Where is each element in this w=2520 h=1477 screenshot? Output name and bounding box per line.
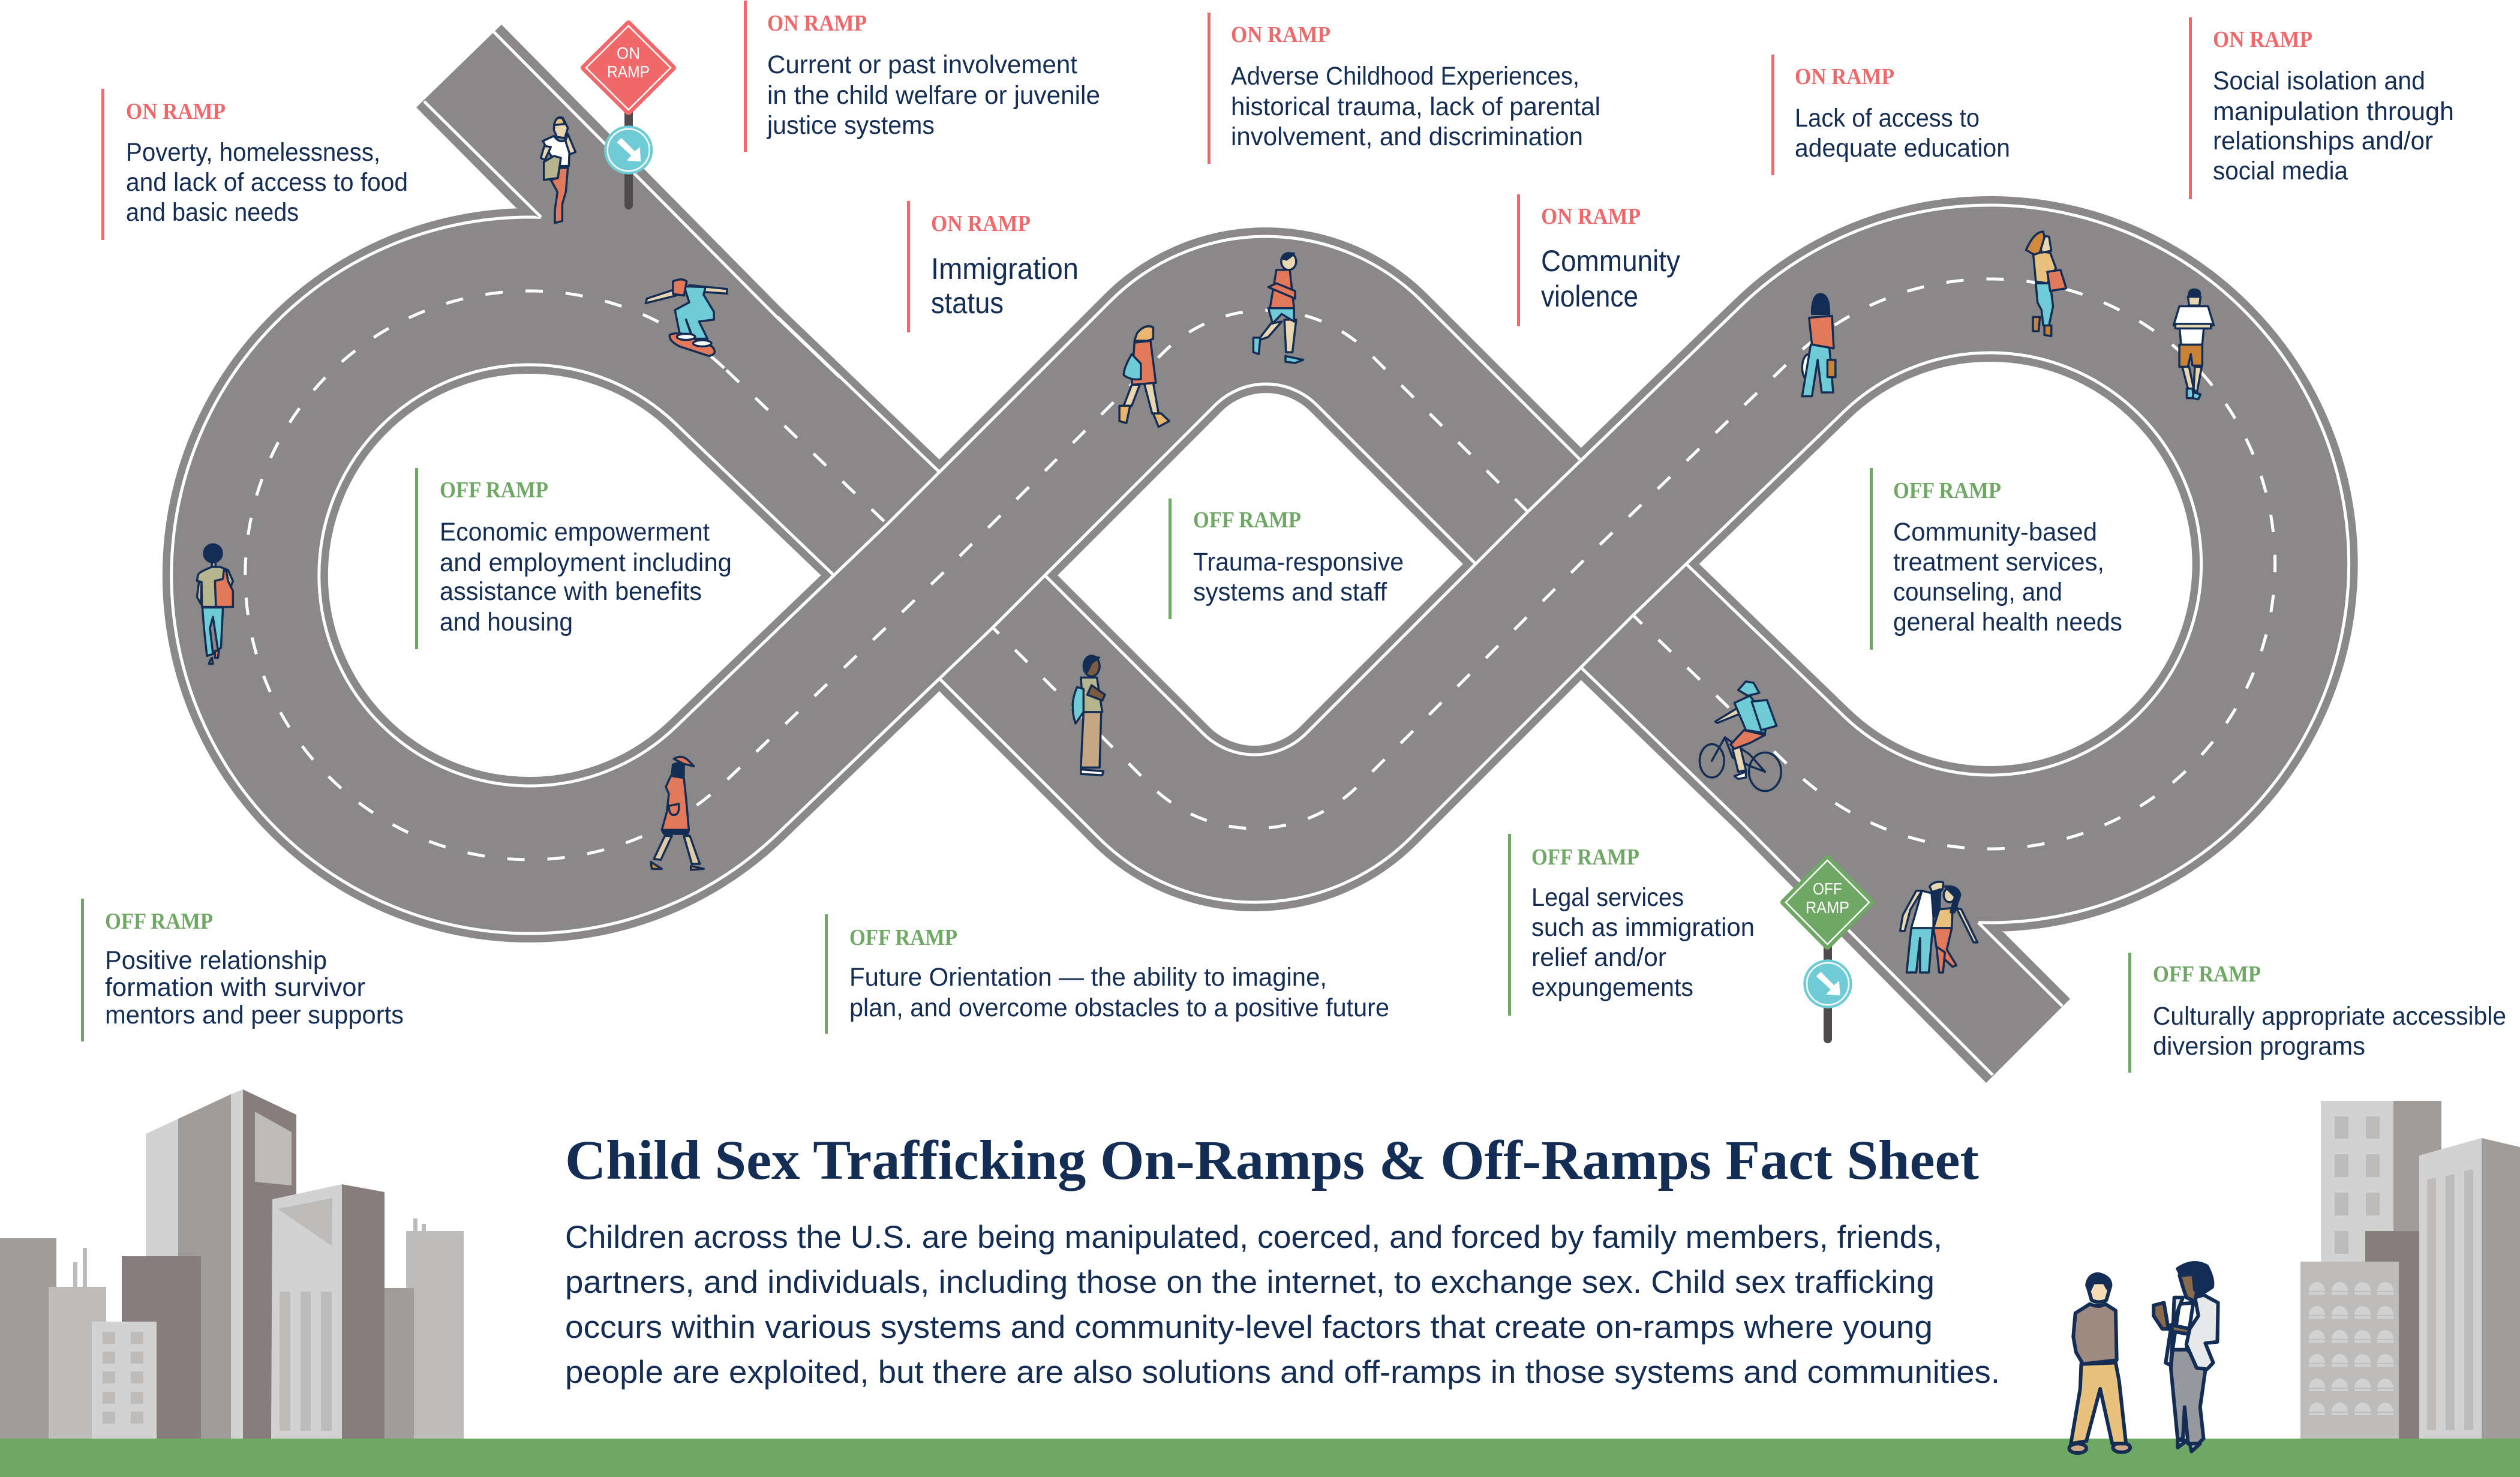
text block: mentors and peer supports xyxy=(105,1001,404,1029)
person: woman in red dress xyxy=(651,757,704,870)
text block: Community-based xyxy=(1893,518,2097,547)
text block: intro: Children across the U.S. are being manipulated, coerced, and forced by family members, friends, xyxy=(565,1220,1942,1255)
label: OFF RAMP xyxy=(849,925,957,950)
text block: Social isolation and xyxy=(2213,67,2425,95)
text block: Immigration xyxy=(931,252,1079,286)
text block xyxy=(1541,244,1680,313)
road: infinity-shaped highway with ramps xyxy=(245,25,2275,1083)
label: ON RAMP xyxy=(126,99,226,124)
person: couple walking xyxy=(1900,882,1978,972)
panel: on ramp community violence xyxy=(1517,194,1680,326)
text block: social media xyxy=(2213,157,2348,185)
text block: in the child welfare or juvenile xyxy=(767,81,1100,110)
panel: on ramp social isolation xyxy=(2189,17,2454,199)
text block xyxy=(2213,67,2454,185)
text block: Poverty, homelessness, xyxy=(126,138,380,167)
text block: and employment including xyxy=(440,548,732,577)
text block: relationships and/or xyxy=(2213,127,2433,155)
text block: and basic needs xyxy=(126,198,299,227)
panel: off ramp trauma-responsive xyxy=(1169,499,1404,619)
panel: off ramp positive relationship xyxy=(81,899,404,1041)
text block xyxy=(105,946,404,1029)
building group: right skyline xyxy=(2300,1101,2520,1439)
text block: manipulation through xyxy=(2213,97,2454,126)
panel: on ramp immigration xyxy=(907,201,1079,332)
text block: systems and staff xyxy=(1193,578,1387,607)
text block xyxy=(766,50,1100,140)
sign: on ramp: RAMP xyxy=(607,62,650,81)
text block: Legal services xyxy=(1531,883,1684,912)
panel: on ramp poverty xyxy=(101,89,408,240)
panel: off ramp future orientation xyxy=(825,914,1389,1034)
person: man in white tee xyxy=(2174,289,2213,400)
text block: relief and/or xyxy=(1531,943,1666,972)
person: polka dot dress woman xyxy=(1119,326,1169,427)
text block: Trauma-responsive xyxy=(1193,548,1404,577)
text block xyxy=(126,138,408,227)
panel: off ramp legal services xyxy=(1508,834,1755,1016)
text block: treatment services, xyxy=(1893,548,2104,577)
person: standing man xyxy=(2069,1274,2130,1453)
sign: on ramp: ON xyxy=(617,44,640,62)
text block: assistance with benefits xyxy=(440,577,702,606)
text block: such as immigration xyxy=(1531,913,1755,942)
text block: intro: people are exploited, but there are also solutions and off-ramps in those systems and communities. xyxy=(565,1355,2000,1390)
sign: off ramp: RAMP xyxy=(1806,898,1849,917)
sign: on ramp xyxy=(584,23,673,209)
text block: expungements xyxy=(1531,973,1693,1002)
label: ON RAMP xyxy=(2213,27,2312,52)
text block: justice systems xyxy=(766,111,935,140)
label: OFF RAMP xyxy=(105,909,213,934)
text block: and lack of access to food xyxy=(126,168,408,197)
title: Child Sex Trafficking On-Ramps & Off-Ramps Fact Sheet xyxy=(565,1130,1979,1191)
text block xyxy=(931,252,1079,320)
person: cyclist xyxy=(1699,682,1781,791)
text block: Adverse Childhood Experiences, xyxy=(1231,62,1579,91)
panel: off ramp diversion programs xyxy=(2128,953,2506,1073)
label: ON RAMP xyxy=(767,11,867,36)
label: ON RAMP xyxy=(1795,64,1894,89)
label: OFF RAMP xyxy=(440,478,548,503)
label: OFF RAMP xyxy=(2153,962,2261,987)
text block: historical trauma, lack of parental xyxy=(1231,92,1600,121)
text block: Positive relationship xyxy=(105,946,327,975)
panel: on ramp adverse experiences xyxy=(1208,13,1600,164)
text block xyxy=(1193,548,1404,607)
text block xyxy=(1231,62,1600,151)
person: walker with coral backpack xyxy=(197,544,233,664)
sign: off ramp xyxy=(1783,858,1872,1043)
text block: adequate education xyxy=(1795,134,2010,163)
text block: violence xyxy=(1541,280,1638,313)
person: boy with blue backpack xyxy=(1073,656,1105,775)
person: woman on phone xyxy=(541,117,575,223)
label: ON RAMP xyxy=(931,211,1031,236)
label: OFF RAMP xyxy=(1193,508,1301,533)
panel: off ramp economic empowerment xyxy=(415,468,732,649)
text block xyxy=(849,963,1389,1022)
ground xyxy=(0,1439,2520,1477)
person: woman in salmon top xyxy=(1802,294,1836,396)
panel: on ramp education xyxy=(1771,55,2010,175)
building group: left skyline xyxy=(0,1089,464,1439)
label: ON RAMP xyxy=(1231,22,1330,47)
text block: Community xyxy=(1541,244,1680,278)
person: standing woman in blazer xyxy=(2153,1263,2218,1451)
person: skateboarder xyxy=(645,280,727,356)
text block: general health needs xyxy=(1893,608,2122,637)
text block: and housing xyxy=(440,608,573,637)
text block xyxy=(440,518,732,637)
text block: diversion programs xyxy=(2153,1032,2365,1061)
text block: Culturally appropriate accessible xyxy=(2153,1002,2506,1031)
text block: intro: partners, and individuals, including those on the internet, to exchange sex. Child sex trafficking xyxy=(565,1265,1935,1300)
text block: Current or past involvement xyxy=(767,50,1077,79)
text block: counseling, and xyxy=(1893,578,2062,607)
text block: Lack of access to xyxy=(1795,104,1980,133)
text block: intro xyxy=(565,1220,2000,1390)
text block: plan, and overcome obstacles to a positive future xyxy=(849,993,1389,1022)
text block: formation with survivor xyxy=(105,973,365,1002)
text block: Future Orientation — the ability to imagine, xyxy=(849,963,1327,992)
text block: involvement, and discrimination xyxy=(1231,122,1583,151)
text block: intro: occurs within various systems and community-level factors that create on-ramps where young xyxy=(565,1310,1933,1345)
text block xyxy=(1893,518,2122,637)
text block: status xyxy=(931,286,1004,320)
text block xyxy=(1795,104,2010,163)
label: OFF RAMP xyxy=(1531,845,1639,870)
sign: off ramp: OFF xyxy=(1813,879,1842,898)
person: runner xyxy=(1253,253,1303,363)
person: woman with bag xyxy=(2026,232,2067,336)
text block xyxy=(2153,1002,2506,1061)
text block: Economic empowerment xyxy=(440,518,710,547)
panel: off ramp community-based treatment xyxy=(1870,468,2122,650)
text block xyxy=(1531,883,1755,1002)
panel: on ramp systems xyxy=(744,1,1100,152)
label: ON RAMP xyxy=(1541,204,1641,229)
label: OFF RAMP xyxy=(1893,478,2001,503)
